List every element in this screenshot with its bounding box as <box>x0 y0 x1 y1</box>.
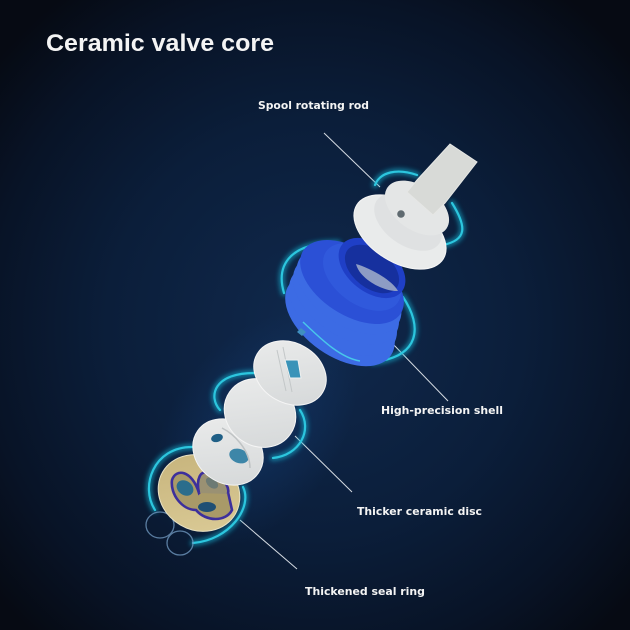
part: ceramic disc with square hole <box>242 328 338 418</box>
part: plain ceramic disc <box>211 365 309 461</box>
icon: rotating rod <box>407 144 477 215</box>
label: thicker ceramic disc: Thicker ceramic disc <box>357 505 482 518</box>
part: white ported disc <box>180 405 276 499</box>
part: blue high-precision shell <box>269 223 419 385</box>
part: white spool cap with rod <box>341 144 477 284</box>
shell body <box>269 230 417 385</box>
label: high-precision shell: High-precision shell <box>381 404 503 417</box>
label: thickened seal ring: Thickened seal ring <box>305 585 425 598</box>
glowing arcs behind the parts <box>149 172 462 543</box>
icon: seal o-rings <box>146 512 193 555</box>
label: spool rotating rod: Spool rotating rod <box>258 99 369 112</box>
part: gold seal disc <box>144 440 254 546</box>
title: Ceramic valve core <box>46 30 274 57</box>
leader lines <box>240 133 448 569</box>
